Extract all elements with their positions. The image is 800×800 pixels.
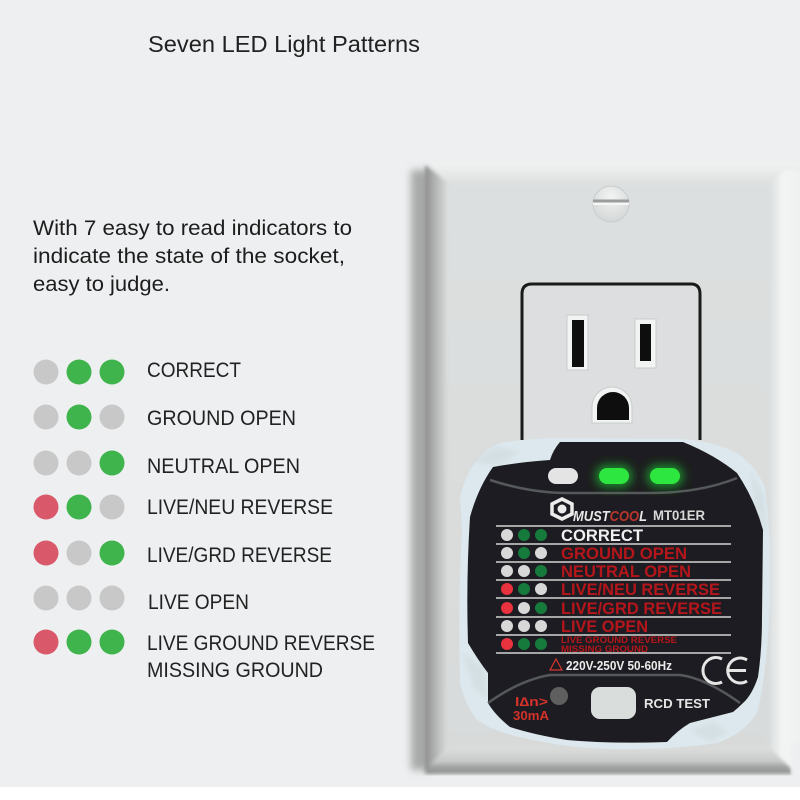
panel indicator labels: CORRECT [561,526,644,545]
pattern: live ground reverse missing ground: MISSING GROUND [147,659,323,682]
pattern: neutral open: NEUTRAL OPEN [147,455,300,478]
device black panel [467,442,763,743]
panel indicator labels: LIVE/GRD REVERSE [561,599,722,618]
pattern: live ground reverse missing ground [34,630,375,682]
pattern: neutral open [34,450,300,478]
pattern: live/grd reverse: LIVE/GRD REVERSE [147,544,332,567]
voltage rating: 220V-250V 50-60Hz [566,659,672,673]
panel indicator labels: LIVE OPEN [561,617,648,636]
pattern: ground open: GROUND OPEN [147,407,296,430]
leakage current label [513,695,549,723]
panel indicator labels: LIVE GROUND REVERSE [561,635,677,645]
pattern: live/grd reverse [34,540,332,567]
pattern: live/neu reverse [34,494,333,520]
pattern: live ground reverse missing ground: LIVE GROUND REVERSE [147,632,375,655]
panel indicator labels: GROUND OPEN [561,544,687,563]
screw [593,186,629,222]
brand logo: MUSTCOOL [573,508,647,525]
pattern: live open: LIVE OPEN [148,591,249,614]
RCD tester device [459,438,770,749]
left slot [567,315,588,370]
pattern: correct [34,359,241,384]
leakage current label: I∆n> [515,695,548,709]
pattern: correct: CORRECT [147,359,241,382]
panel indicator dots [501,529,547,650]
device housing [459,438,770,749]
description text: With 7 easy to read indicators to [33,217,352,240]
RCD test button [591,687,636,719]
pattern: ground open [34,404,296,430]
pattern: live/neu reverse: LIVE/NEU REVERSE [147,496,333,519]
description text: easy to judge. [33,273,170,296]
wall plate [411,163,800,778]
leakage current label: 30mA [513,709,549,723]
description text: indicate the state of the socket, [33,245,345,268]
bottom white strip [0,787,800,800]
grey indicator [550,687,568,705]
panel indicator labels: LIVE/NEU REVERSE [561,580,720,599]
status LEDs [548,464,684,488]
panel grooves [488,478,740,703]
brand logo: MT01ER [653,508,705,523]
pattern: live open [34,586,249,614]
ground hole [592,387,632,423]
legend: LED light patterns [34,359,375,682]
brand logo [552,499,705,525]
description text [33,217,352,296]
title: Seven LED Light Patterns [148,31,420,57]
panel indicator labels [561,526,722,654]
outlet socket [522,284,700,440]
panel row lines [496,526,731,653]
panel indicator labels: NEUTRAL OPEN [561,562,691,581]
RCD test label: RCD TEST [644,696,710,711]
right slot [635,319,656,368]
panel indicator labels: MISSING GROUND [561,644,649,654]
CE mark [703,658,747,684]
